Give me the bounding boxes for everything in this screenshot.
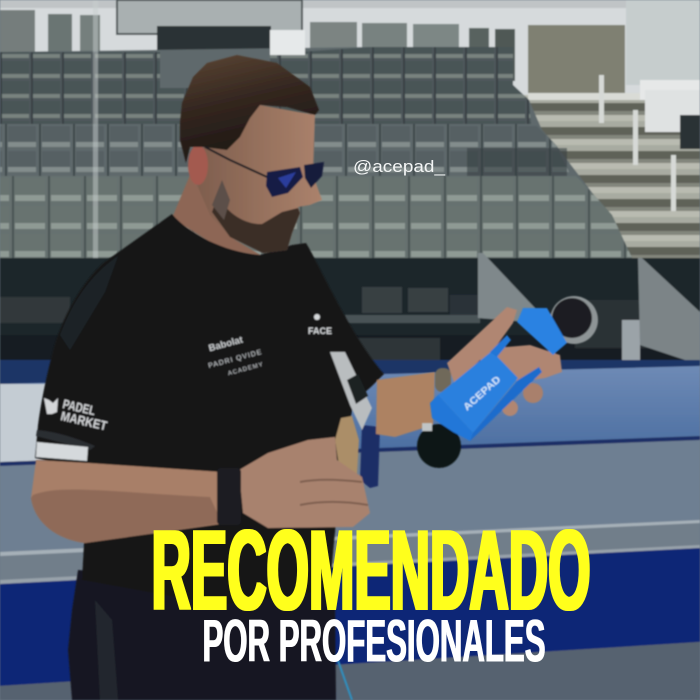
logo: Babolat academy: PADRI QVIDE: [208, 349, 263, 370]
bracelet: [435, 368, 451, 392]
finger: [502, 400, 518, 416]
sleeve band: [36, 442, 88, 461]
logo: Babolat academy: [203, 330, 266, 382]
market: MARKET: [59, 408, 109, 434]
shirt: [35, 214, 384, 605]
suction cup bottom: [417, 423, 461, 468]
hand: [239, 437, 370, 528]
logo: chest: [308, 314, 332, 336]
building facade: [0, 0, 700, 110]
sideburn grey: [212, 180, 230, 220]
handle text: @acepad_: [353, 158, 446, 176]
device end lower: [430, 395, 473, 441]
ear: [188, 145, 208, 185]
court: walls and floor: [0, 360, 700, 700]
phone: [335, 416, 359, 474]
device plate: [438, 351, 518, 433]
suction cup top: [550, 296, 598, 344]
glass post: [93, 0, 98, 275]
trousers: [68, 570, 336, 700]
fingers shade: [300, 480, 368, 505]
logo: chest: FACE: [308, 326, 332, 336]
logo: Babolat academy: Babolat: [208, 334, 245, 354]
finger: [523, 383, 543, 403]
logo: Padel Market: [44, 396, 109, 434]
head: [180, 55, 324, 253]
face: [195, 105, 322, 253]
device logo: ACEPAD: [462, 374, 503, 413]
person: [31, 55, 435, 700]
watch: [217, 468, 241, 525]
lanyard: [330, 352, 380, 488]
device rail upper: [490, 335, 511, 357]
device: blue ACEPAD holder: [417, 296, 598, 468]
cable: [336, 655, 352, 700]
neck: [172, 175, 262, 256]
seating stands: [0, 30, 632, 258]
steps: [505, 75, 700, 262]
hair: [180, 55, 319, 163]
padel: PADEL: [61, 396, 97, 418]
arm right: [376, 372, 435, 437]
lower tier with chairs: [0, 253, 700, 392]
logo: Babolat academy: ACADEMY: [227, 362, 264, 377]
device cap: [517, 308, 567, 355]
device rail lower: [470, 367, 542, 441]
beard: [212, 195, 300, 253]
hand behind device: [447, 307, 562, 385]
arm left: [31, 460, 228, 543]
sunglasses: [205, 147, 324, 197]
shirt highlight: [60, 256, 118, 350]
